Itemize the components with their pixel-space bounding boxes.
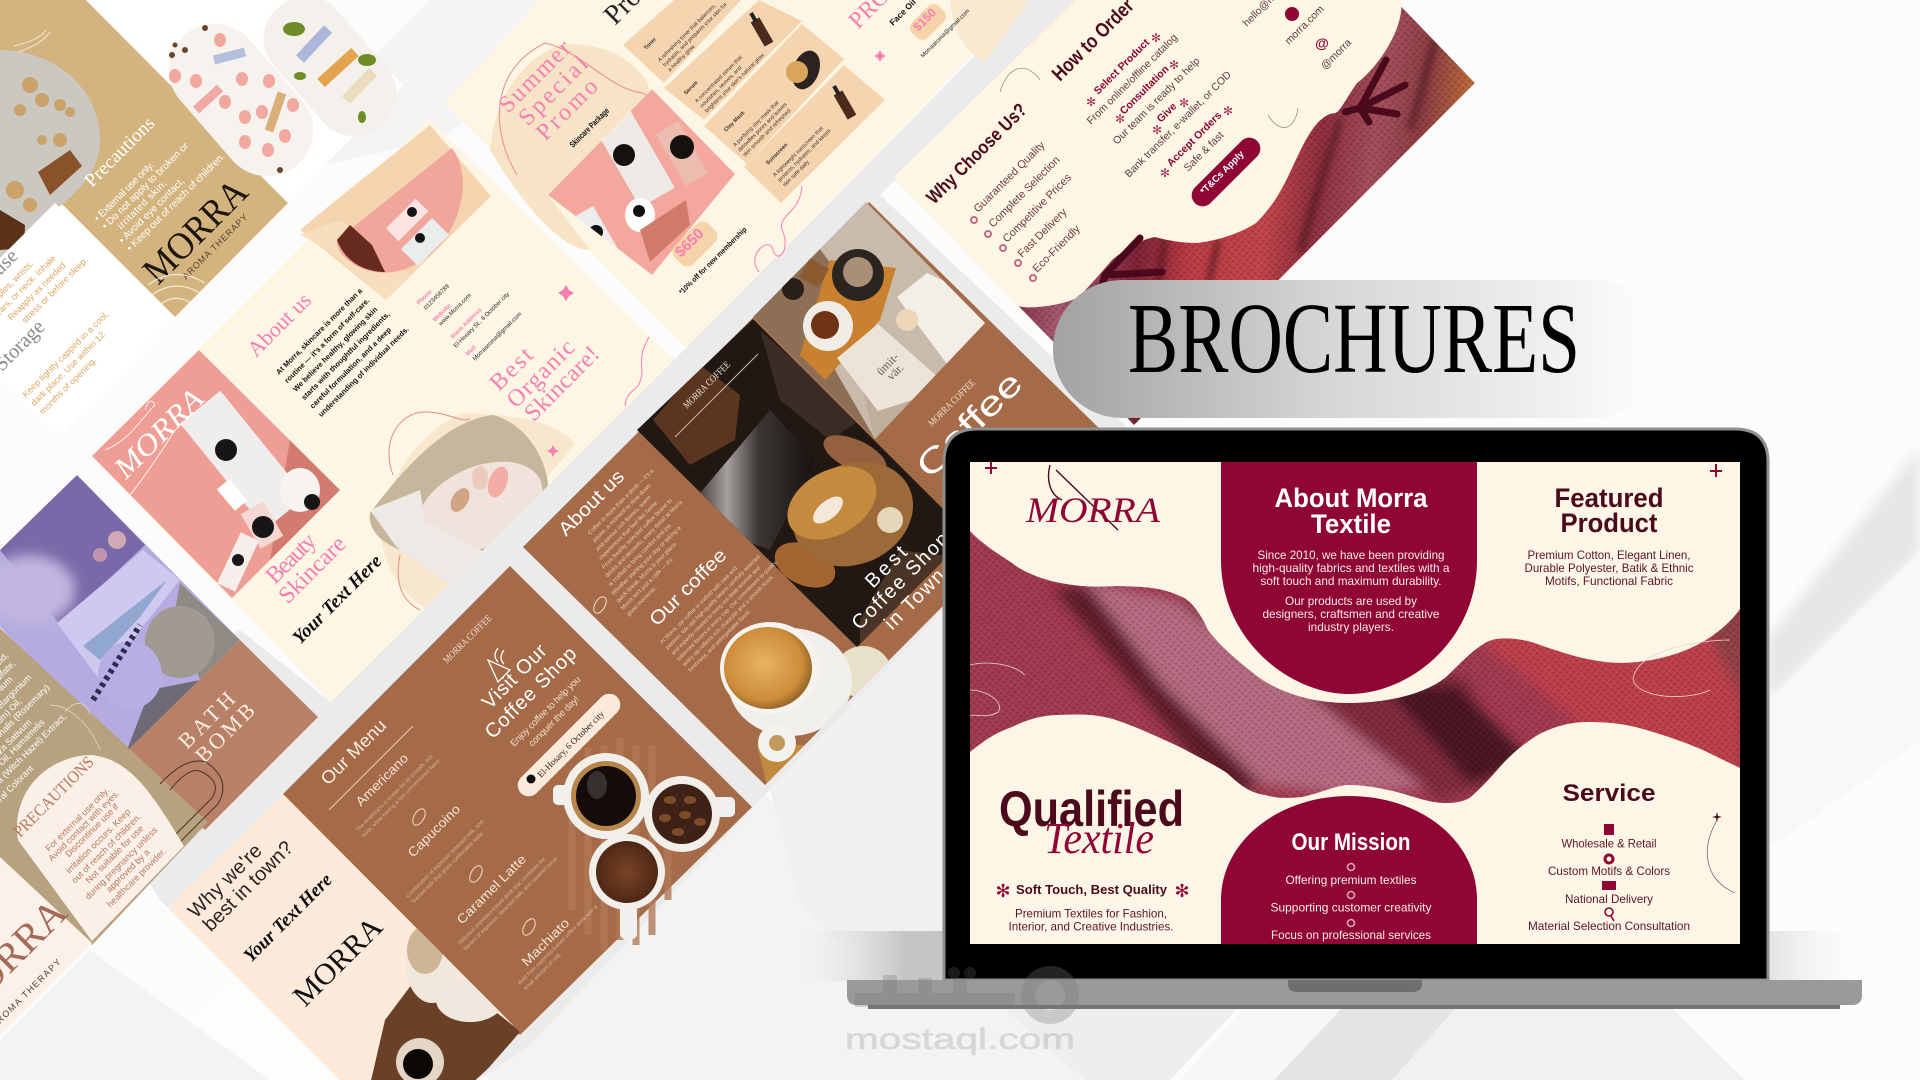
text: precautions list: • External use only, (92, 160, 157, 224)
screen: qualified textile (1000, 790, 1182, 854)
text: contact block: Morraaroma@gmail.com (472, 311, 523, 362)
list: why choose us: Guaranteed Quality (972, 139, 1048, 215)
panel: aroma therapy gold brochure (0, 0, 288, 317)
icon: truck (1602, 881, 1616, 890)
text: precautions body: Discontinue use if (63, 801, 121, 859)
list: why choose us (972, 139, 1083, 275)
menu descriptions: Bold from espresso-based coffee drink with a (517, 904, 600, 986)
photo: pink product flatlay (548, 89, 735, 275)
text: about us body: careful formulation, and a deep (308, 325, 393, 410)
panel: textile brochure how to order (893, 0, 1475, 425)
text: contact block: 0123456789 (423, 283, 451, 311)
text: precautions body: during pregnancy unless (83, 825, 160, 901)
text: precautions heading: Precautions (81, 113, 159, 192)
text: why choose us: Why Choose Us? (923, 100, 1032, 209)
text: coffee paragraph 2: passion. We use high-quality beans carefully selected (665, 554, 762, 651)
screen: textile description: Interior, and Creative Industries. (1008, 920, 1174, 934)
screen: soft touch tagline (995, 881, 1190, 901)
text: morra script on pink: MORRA (107, 382, 211, 486)
menu items: Capucoino (405, 801, 463, 860)
text: bath bomb: BATH (173, 686, 240, 754)
text: coffee paragraph 1: pause, a moment to slow down (592, 483, 653, 544)
icons: step asterisks: ✻ (1151, 31, 1161, 45)
panel: coffee brochure upper (523, 195, 1111, 785)
icon: search (1605, 908, 1614, 921)
pill: location: El-Hosary, 6 October city (535, 708, 606, 779)
service items: Material Selection Consultation (1528, 919, 1690, 933)
laptop base (847, 980, 1862, 1005)
peach blob (490, 44, 650, 250)
text: best organic skincare: Organic (502, 335, 580, 413)
screen: about panel (1221, 462, 1477, 694)
text: about us coffee: About us (555, 466, 629, 541)
screen: service list (1528, 780, 1690, 933)
menu descriptions: Combination of espresso steamed milk, and (405, 820, 485, 899)
text: coffee paragraph 2: freshness, and unforgettable flavor. (687, 608, 753, 674)
icon: at sign: @ (1315, 35, 1329, 51)
icon: pink spark (547, 285, 574, 457)
text: coffee paragraph 2: and expertly roasted to bring out deep aromas and (670, 565, 762, 657)
text: your text here: Your Text Here (289, 551, 387, 649)
text: storage copy: months of opening. (37, 355, 99, 416)
text: email: Morraaroma@gmail.com (920, 8, 971, 59)
icons: step asterisks: ✻ (1169, 58, 1179, 72)
icons: step asterisks: ✻ (1179, 96, 1189, 110)
decorative waves (148, 274, 205, 305)
text: ingredient list (0, 654, 67, 803)
text: precautions list: irritated skin, (116, 178, 169, 232)
cards: product list (623, 0, 885, 203)
photo: serum pens blob (247, 0, 413, 152)
mission list: Offering premium textiles (1286, 873, 1416, 887)
contact details: morra.com (1283, 3, 1327, 47)
icons: step asterisks (1086, 31, 1233, 180)
cup: black coffee (553, 753, 649, 839)
menu descriptions: Delicious espresso-based drink that combines the (457, 856, 547, 946)
text: about us body: We believe healthy, glowing skin (291, 305, 380, 393)
icons: beans (410, 807, 538, 937)
icon: star (1712, 812, 1722, 822)
text: storage copy: Keep tightly capped in a cool, (20, 309, 111, 399)
menu items: Caramel Latte (454, 851, 529, 927)
card: clay mask (704, 24, 844, 164)
text: about us body: understanding of individual needs. (316, 325, 411, 419)
cup: coffee beans (644, 776, 735, 852)
screen: morra logo (1025, 465, 1161, 530)
watermark (845, 967, 1075, 1056)
list: order steps: Bank transfer, e-wallet, or COD (1123, 69, 1234, 180)
watermark logo (855, 973, 1072, 1017)
screen: featured product (1524, 483, 1694, 588)
text: coffee paragraph 1: Morra isn't just a cafe — it's (620, 557, 674, 612)
text: precautions body: out of reach of children. (70, 812, 143, 885)
icon: dark flower top (1345, 60, 1405, 122)
stripes behind cups (572, 738, 668, 950)
text: precautions list: • Do not apply to broken or (100, 140, 192, 232)
text: coffee paragraph 1: drinks and desserts, every detail at Morra (604, 499, 684, 579)
card copy: Toner (643, 36, 659, 51)
panel: face oil peach arc (950, 0, 1030, 62)
screen: textile photo (970, 531, 1740, 803)
panel: visit coffee shop menu (283, 566, 752, 1035)
laptop bezel (944, 429, 1768, 980)
icons: step asterisks: ✻ (1086, 95, 1096, 109)
list: order steps (1085, 32, 1234, 180)
text: about body: high-quality fabrics and textiles with a (1252, 561, 1450, 575)
text: coffee paragraph 2: every sip reflects rich character and a smooth finish, (682, 574, 776, 668)
card copy: Serum (683, 80, 700, 96)
text: best organic skincare: Skincare! (520, 341, 605, 427)
service items: Custom Motifs & Colors (1548, 864, 1670, 878)
text: coffee paragraph 1: Whether starting your day or taking a (611, 525, 683, 597)
photo: pink skincare arch (337, 148, 463, 273)
text: precautions body: irritation occurs. Keep (64, 807, 132, 875)
card copy: A purifying clay mask that (732, 100, 781, 148)
card copy: skin smooth and refreshed. (742, 107, 794, 158)
decorative leaf (50, 703, 100, 750)
text: your text here: Your Text Here (240, 869, 337, 967)
screen: featured product: Featured (1554, 483, 1664, 513)
text: coffee paragraph 1: is crafted to bring comfort and joy. (608, 522, 674, 588)
card copy: a healthy glow. (667, 43, 697, 73)
menu descriptions: The Americano is known for its smooth, rich (355, 754, 435, 833)
cream wave area (893, 0, 1401, 307)
panel: bath bomb photo (0, 470, 318, 830)
button: T&Cs apply (1187, 133, 1265, 211)
outline curve (389, 412, 470, 610)
decorative swirl on pink (105, 401, 175, 495)
heading: about morra textile: About Morra (1274, 483, 1428, 513)
laptop screen (970, 462, 1740, 944)
panel: morra bottom-left (0, 857, 92, 1035)
collage gap backing (40, 0, 1130, 1080)
text: precautions body: For external use only. (43, 786, 111, 853)
menu descriptions: taste, while having a fast concentrated flavor. (361, 757, 443, 839)
service items: Wholesale & Retail (1562, 836, 1656, 850)
card copy: Sunscreen (765, 142, 790, 166)
cup: ground coffee (589, 834, 665, 939)
screen: decorative swirl right (1707, 820, 1735, 893)
title pill (1053, 280, 1663, 418)
arch panel (17, 755, 184, 941)
icons: step asterisks: ✻ (1152, 123, 1162, 137)
text: contact block: Mail (465, 345, 478, 357)
panel: skincare brochure 1 (80, 119, 674, 702)
screen: plus marks (985, 462, 1722, 477)
panel: flatlay photos (86, 0, 413, 203)
text: best coffee shop in town: in Town (880, 565, 949, 634)
photo: pink morra panel (92, 350, 340, 598)
card copy: hydrates, and prepares your skin for (662, 2, 729, 68)
title text: BROCHURES (1128, 282, 1580, 394)
service items: National Delivery (1565, 892, 1653, 906)
icon: asterisks: ✻ (1174, 881, 1190, 901)
panel: why we're best in town (168, 794, 525, 1080)
screen: qualified textile: Qualified (999, 781, 1184, 837)
screen: cream top wave (970, 462, 1740, 703)
menu items: Machiato (519, 915, 572, 969)
price tag: $650 (669, 218, 721, 270)
card copy: Clay Mask (723, 109, 747, 133)
icons: step asterisks: ✻ (1115, 112, 1125, 126)
card copy: A refreshing toner that balances, (657, 3, 718, 63)
list: order steps: Safe & fast (1182, 129, 1226, 174)
screen: morra logo: MORRA (1025, 490, 1161, 530)
text: precautions heading: PRECAUTIONS (9, 752, 98, 841)
screen: textile description: Premium Textiles for Fashion, (1015, 906, 1167, 920)
icon: coffee beans (591, 595, 609, 615)
text: coffee paragraph 1: and savour rich flavors, warm (595, 495, 653, 553)
text: bath bomb: BOMB (190, 698, 260, 768)
decorative curl (755, 186, 802, 272)
screen: cream bottom wave (970, 714, 1740, 944)
list: order steps: Consultation (1118, 63, 1171, 117)
text: coffee paragraph 1: good moments. (626, 585, 659, 618)
bath bomb colour panel (125, 640, 318, 830)
logo: morra aroma therapy: MORRA (135, 170, 257, 292)
text: about body: designers, craftsmen and creative (1262, 607, 1440, 621)
text: coffee paragraph 1: experiences that feel like home. (598, 499, 660, 562)
text: about body: Our products are used by (1285, 594, 1417, 608)
price tag: $150: $150 (910, 5, 939, 34)
text: coffee paragraph 2: At Morra, our coffee is crafted with care and (659, 566, 739, 645)
screen: featured product: Product (1560, 508, 1658, 538)
text: beauty skincare: Skincare (274, 531, 351, 609)
menu descriptions: foamed milk that gives comfortable taste. (411, 830, 486, 905)
menu items: Americano (353, 750, 411, 809)
menu descriptions (355, 751, 605, 992)
text: our coffee: Our coffee (646, 545, 731, 631)
text: why we're best in town: best in town? (199, 837, 298, 936)
text: coffee paragraph 2: balanced flavors in every cup. Our commitment to quality, (676, 559, 779, 662)
text: contact block: Phone (416, 289, 434, 306)
laptop notch (1288, 980, 1422, 992)
icons: step asterisks: ✻ (1160, 166, 1170, 180)
text: contact block: www.Morra.com (437, 293, 473, 328)
card copy: nourishes, revives, and (699, 65, 743, 109)
card: toner (623, 0, 741, 83)
text: morra coffee label: MORRA COFFEE (441, 613, 494, 666)
text: about body: Since 2010, we have been providing (1258, 548, 1444, 562)
text: featured body: Premium Cotton, Elegant Linen, (1528, 548, 1690, 562)
screen: qualified textile: Textile (1044, 814, 1154, 863)
icon: store (1604, 824, 1614, 835)
screen: decorative thin lines (970, 640, 1730, 716)
icon: asterisks: ✻ (995, 881, 1011, 901)
list: why choose us: Fast Delivery (1016, 206, 1070, 260)
icon: coffee cup (488, 648, 510, 682)
text: best coffee shop in town: Best (861, 541, 912, 593)
photo: barista latte (637, 319, 942, 647)
text: storage copy: dark place. Use within 12 (29, 330, 107, 408)
text: best coffee shop in town: Coffee Shop (848, 528, 954, 634)
menu descriptions: flavors of espresso, steamed milk, and caramel syrup. (463, 855, 560, 952)
peach square with photo (300, 125, 491, 300)
text: best organic skincare: Best (485, 342, 539, 396)
text: membership note: *10% off for new membership (677, 225, 749, 296)
card: sunscreen (744, 65, 885, 203)
card copy: A lightweight sunscreen that (772, 125, 825, 178)
contact details (1241, 0, 1354, 72)
text: visit our coffee shop: Coffee Shop (481, 643, 581, 743)
heading: about morra textile: Textile (1311, 509, 1391, 539)
text: featured body: Durable Polyester, Batik & Ethnic (1524, 561, 1694, 575)
pill: location (513, 689, 625, 801)
card copy: skin safe daily. (782, 159, 812, 188)
text: about us body: At Morra, skincare is more than a (274, 286, 365, 376)
mission list: Focus on professional services (1271, 928, 1431, 942)
icons: step asterisks: ✻ (1223, 104, 1233, 118)
text: precautions body: Not suitable for use (84, 823, 146, 885)
laptop platform shadow (800, 931, 1860, 981)
text: coffee paragraph 1: From freshly selected coffee beans to (601, 498, 674, 570)
icon: location pin (526, 774, 536, 784)
text: summer special promo: Summer (494, 36, 577, 118)
contact details: @morra (1319, 37, 1354, 72)
list: why choose us: Competitive Prices (1001, 171, 1074, 245)
decorative lines on gold (14, 30, 50, 52)
logo: morra: MORRA (287, 910, 389, 1013)
price tag: $150 (907, 1, 949, 43)
text: coffee heading hidden by laptop: Coffee (909, 364, 1030, 486)
card copy: detoxifies pores and leaves (737, 102, 789, 153)
icon: dark flower bottom (1097, 238, 1162, 305)
divider line (329, 726, 413, 810)
text: beauty skincare: Beauty (261, 528, 322, 589)
text: visit our coffee shop: Visit Our (478, 640, 552, 714)
text: morra coffee label lower: MORRA COFFEE (926, 378, 978, 429)
panel: precautions tan brochure (0, 628, 223, 945)
bullets: why choose us (971, 217, 1036, 281)
photo: petals blob (150, 5, 332, 195)
text: why we're best in town: Why we're (184, 840, 267, 923)
text: precautions body: Avoid contact with eyes. (46, 788, 121, 863)
text: coffee paragraph 1: Coffee is more than a drink — it's a (587, 468, 656, 536)
laptop base underside (868, 1005, 1840, 1009)
text: morra coffee label: MORRA COFFEE (681, 360, 733, 411)
text: summer special promo: Special (514, 51, 594, 131)
card copy: brightens your skin's natural glow. (704, 51, 767, 114)
photo: facial mask blob (360, 410, 575, 610)
screen: mission panel (1221, 796, 1477, 944)
text: contact block (416, 283, 523, 362)
button: T&Cs apply: *T&Cs Apply (1198, 148, 1247, 197)
menu items (353, 750, 572, 969)
photo: dried flowers arch (0, 50, 100, 260)
list: order steps: Our team is ready to help (1111, 55, 1203, 147)
list: order steps: Select Product (1092, 36, 1152, 97)
text: coffee paragraph 1: quick break, Morra is your place. (615, 541, 679, 604)
text: precautions list: • Avoid eye contact, (117, 176, 187, 246)
text: enjoy coffee: conquer the day! (527, 694, 582, 749)
list: order steps: Accept Orders (1165, 109, 1224, 169)
card copy: protects, hydrates, and keeps (777, 128, 833, 183)
heading: our mission: Our Mission (1292, 829, 1410, 856)
text: about body: soft touch and maximum durability. (1260, 574, 1442, 588)
photo: coffee cup (720, 622, 891, 785)
list: order steps: From online/offline catalog (1085, 32, 1180, 127)
text: contact block: El-Hosary St., 6 October city (453, 292, 511, 349)
photo: cozy table: vär. (884, 361, 906, 383)
text: use copy: Reapply as needed (6, 260, 68, 322)
divider line (675, 354, 758, 437)
text: our menu: Our Menu (317, 715, 390, 789)
screen: soft touch tagline: Soft Touch, Best Quality (1016, 882, 1168, 897)
product bottle icons (751, 17, 773, 47)
list: why choose us: Complete Selection (987, 154, 1063, 230)
card copy (643, 0, 838, 188)
text: featured body: Motifs, Functional Fabric (1545, 574, 1673, 588)
text: skincare package: Skincare Package (567, 105, 611, 149)
text: about us heading: About us (242, 287, 316, 362)
text: enjoy coffee: Enjoy coffee to help you (508, 674, 583, 749)
photo: coffee beans and cups (370, 926, 525, 1080)
screen: service list: Service (1562, 780, 1656, 807)
text: use copy: stress or before sleep. (20, 255, 90, 325)
mission icons (1348, 864, 1354, 926)
card copy: A concentrated serum that (694, 54, 744, 104)
watermark dots (948, 967, 976, 979)
mission list: Supporting customer creativity (1270, 900, 1432, 914)
text: summer special promo: Promo (531, 74, 603, 146)
icon: globe (1285, 7, 1299, 21)
text: about body: industry players. (1308, 620, 1394, 634)
panel: skincare brochure 2 (444, 0, 1030, 348)
laptop mockup (847, 429, 1862, 1009)
text: precautions list: • Keep out of reach of children. (125, 151, 227, 254)
watermark text: mostaql.com (845, 1023, 1075, 1056)
icon: gear (1605, 855, 1613, 863)
photo: cozy table (753, 202, 985, 439)
decorative outline curve (499, 43, 690, 175)
menu descriptions: small amount of milk. (523, 951, 564, 992)
logo: morra aroma therapy: AROMA THERAPY (180, 212, 250, 281)
text: contact block: Store Address (450, 307, 484, 340)
decorative curl (625, 337, 649, 406)
decorative rings (160, 761, 223, 856)
text: precautions body: approved by a (104, 847, 152, 894)
text: about us body: routine — it's a form of self-care. (283, 296, 371, 385)
decorative threads (1000, 68, 1298, 128)
card: serum (664, 0, 802, 120)
photo: cozy table: ümit- (873, 350, 902, 378)
list: why choose us: Eco-Friendly (1031, 223, 1083, 275)
text: contact block: Website (432, 303, 453, 323)
list: order steps: Give (1155, 100, 1179, 125)
text: precautions body: healthcare provider. (105, 846, 168, 909)
icon: pink spark (874, 50, 886, 62)
panel: use and storage white page (0, 203, 175, 434)
text: about us body: starts with thoughtful ingredients, (300, 310, 392, 402)
price tag: $650: $650 (672, 225, 707, 261)
